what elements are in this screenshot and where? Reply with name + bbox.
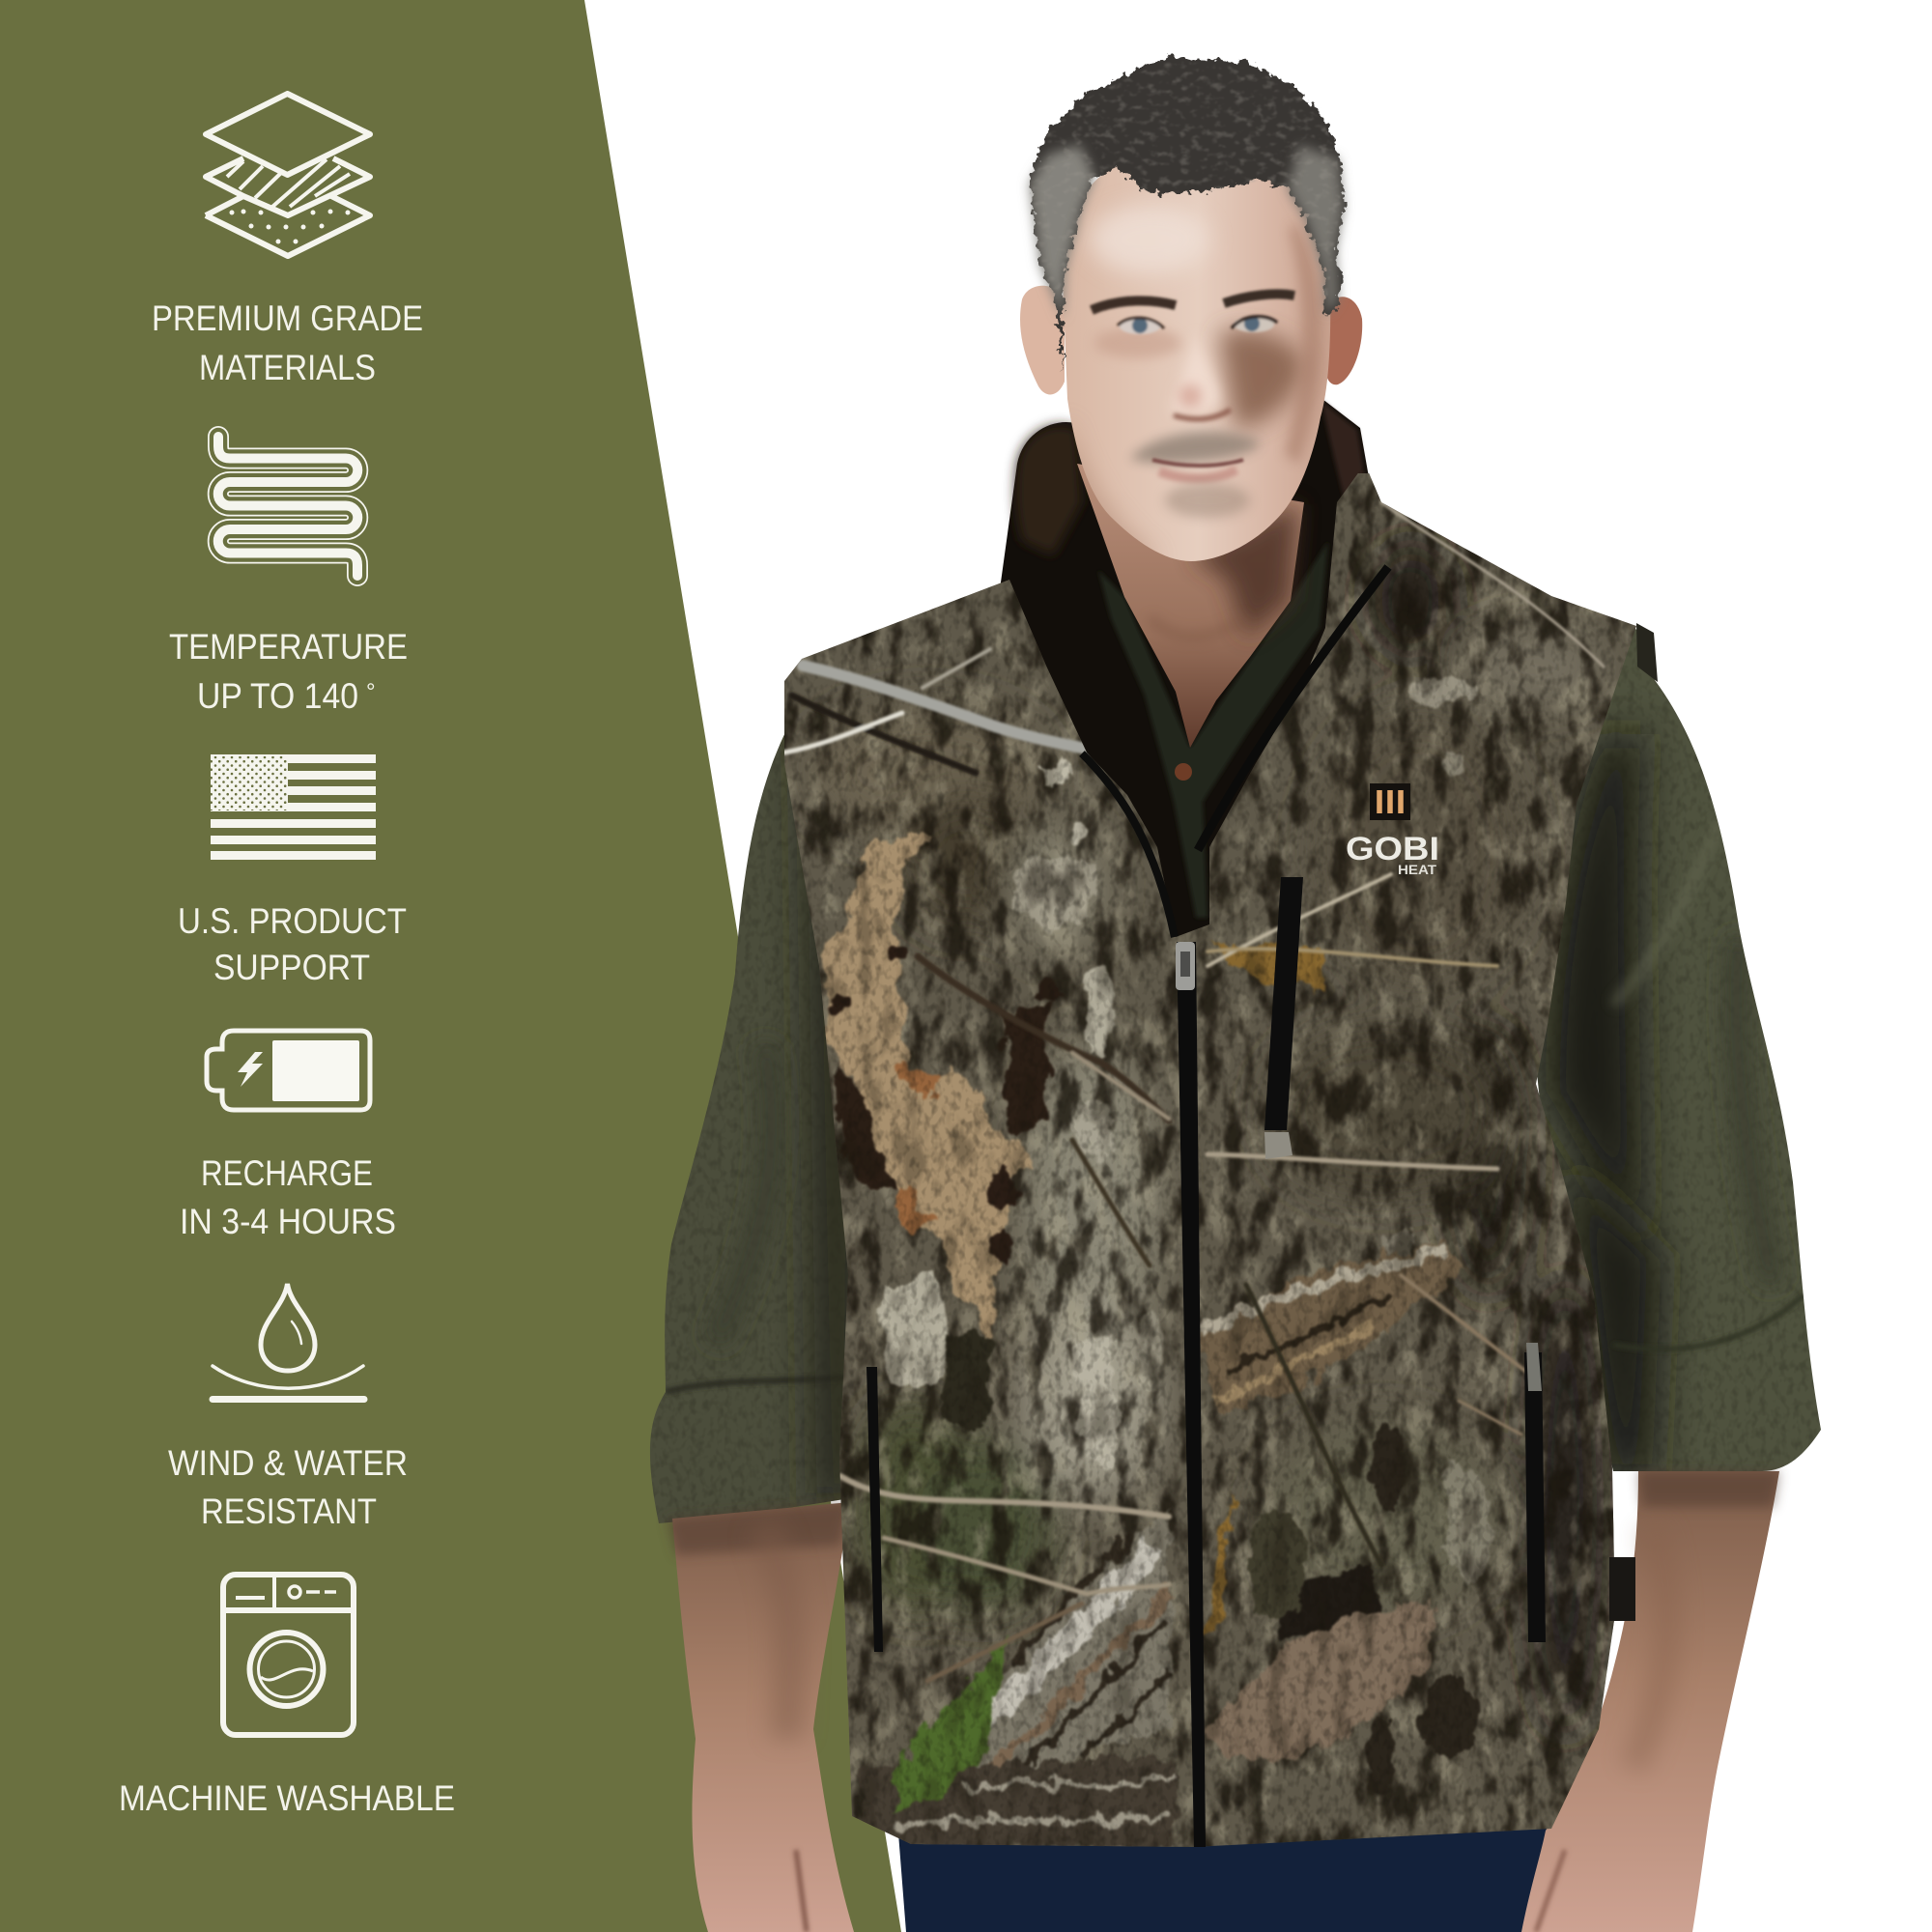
camo: orange leaf edge <box>894 1063 942 1236</box>
camo: dark vertical trunk shadow <box>942 1328 995 1430</box>
camo: hem band <box>860 1758 1177 1847</box>
label: UP TO 140 <box>197 676 358 716</box>
camo: pale bark patches <box>879 677 1492 1594</box>
head: face <box>1063 166 1331 561</box>
vest: right side zipper of collar <box>1198 567 1388 850</box>
camo: broken log <box>1198 1242 1460 1414</box>
camo: large tonal zones <box>811 541 1604 1739</box>
panel: olive feature panel <box>0 0 901 1932</box>
icon: stacked material layers <box>206 94 370 256</box>
right sleeve <box>1538 629 1821 1471</box>
camo: lower-right leaf <box>1208 1599 1434 1761</box>
right eye <box>1232 316 1277 332</box>
face: jaw shading <box>1075 437 1157 552</box>
camo: dark lower-right shapes <box>1246 1425 1476 1802</box>
label: U.S. PRODUCT <box>178 901 407 941</box>
vest: chest pocket zipper <box>1264 877 1303 1159</box>
camo: branches <box>784 502 1604 1681</box>
head: hair <box>1029 57 1345 373</box>
label: PREMIUM GRADE <box>152 298 423 338</box>
camo: lower-right dark above leaf <box>1265 1565 1381 1642</box>
feature: wind and water resistant <box>168 1284 408 1531</box>
shirt button <box>1175 763 1192 781</box>
icon: American flag <box>211 754 376 860</box>
face: moustache <box>1130 432 1261 464</box>
face: left eye socket shade <box>1094 327 1181 358</box>
icon: heating element coil <box>218 437 357 576</box>
vest: left hand pocket zipper <box>867 1367 883 1652</box>
left sleeve <box>650 734 848 1523</box>
feature: U.S. product support <box>178 754 407 987</box>
label <box>180 1153 396 1241</box>
jeans <box>897 1811 1584 1932</box>
dark fleece lining and collar <box>1000 396 1391 952</box>
vest: shoulder nub <box>1636 623 1658 682</box>
face: mouth <box>1152 460 1243 478</box>
label: RECHARGE <box>201 1153 373 1193</box>
label <box>168 1443 408 1531</box>
camo: gold leaf strips <box>1204 942 1329 1642</box>
label: TEMPERATURE <box>169 627 408 667</box>
logo: Gobi Heat patch and wordmark <box>1346 783 1439 877</box>
camo: dark diamond and leaf holes <box>825 944 1065 1265</box>
label: SUPPORT <box>213 948 370 987</box>
label: WIND & WATER <box>168 1443 408 1483</box>
camo: lower-left diagonal trunk <box>908 1507 1171 1787</box>
neck skin <box>1077 464 1304 748</box>
label <box>169 627 408 716</box>
feature: recharge time <box>180 1031 396 1241</box>
vest: left lining edge zipper <box>1082 753 1175 937</box>
feature: machine washable <box>119 1575 455 1818</box>
face: chin stubble <box>1165 483 1250 518</box>
face: shadow right of nose <box>1219 329 1304 430</box>
logo: Gobi Heat patch and wordmark: GOBI <box>1346 831 1439 867</box>
face: temple shading <box>1285 222 1322 464</box>
right forearm and hand <box>1521 1471 1779 1932</box>
camo: dark shadow behind oak leaf <box>836 1005 1048 1190</box>
camo: moss patch <box>889 1633 1005 1811</box>
collar: brown mottled inner left <box>1015 425 1082 555</box>
hair: grey temple right <box>1288 145 1343 315</box>
feature: temperature <box>169 437 408 716</box>
left eyebrow <box>1092 300 1176 310</box>
left eye <box>1118 318 1164 334</box>
right eyebrow <box>1224 294 1294 303</box>
vest: main zipper <box>1176 942 1206 1847</box>
tag on right hip <box>1609 1557 1635 1621</box>
label <box>178 901 407 987</box>
shirt: dark green collar <box>1098 541 1328 918</box>
face: nose <box>1171 333 1231 419</box>
camo: hem pale streaks <box>898 1777 1174 1826</box>
label: ° <box>366 679 376 705</box>
label: MATERIALS <box>199 348 376 387</box>
logo: Gobi Heat patch and wordmark: HEAT <box>1398 862 1436 877</box>
vest: right hand pocket zipper <box>1524 1343 1546 1642</box>
hair: grey temple left <box>1030 145 1094 319</box>
label: RESISTANT <box>201 1492 377 1531</box>
left ear <box>1020 286 1065 394</box>
label <box>152 298 423 387</box>
icon: charging battery <box>207 1031 370 1110</box>
camo: oak leaf <box>821 830 1036 1337</box>
vest: camo fabric <box>763 473 1662 1855</box>
label: MACHINE WASHABLE <box>119 1778 455 1818</box>
icon: water drop on surface <box>213 1284 364 1399</box>
hair: strand texture <box>1032 61 1341 309</box>
feature: premium grade materials <box>152 94 423 387</box>
camo: bark texture <box>763 473 1662 1855</box>
right ear <box>1325 297 1362 384</box>
left forearm and hand <box>667 1502 854 1932</box>
photo: man wearing camo heated vest <box>628 57 1835 1932</box>
face: forehead highlight <box>1090 205 1209 274</box>
icon: washing machine <box>223 1575 354 1735</box>
label: IN 3-4 HOURS <box>180 1202 396 1241</box>
camo: unifying texture overlay <box>763 473 1662 1855</box>
camo: organic printed detail <box>821 677 1492 1847</box>
collar: brown inner right <box>1321 401 1366 512</box>
